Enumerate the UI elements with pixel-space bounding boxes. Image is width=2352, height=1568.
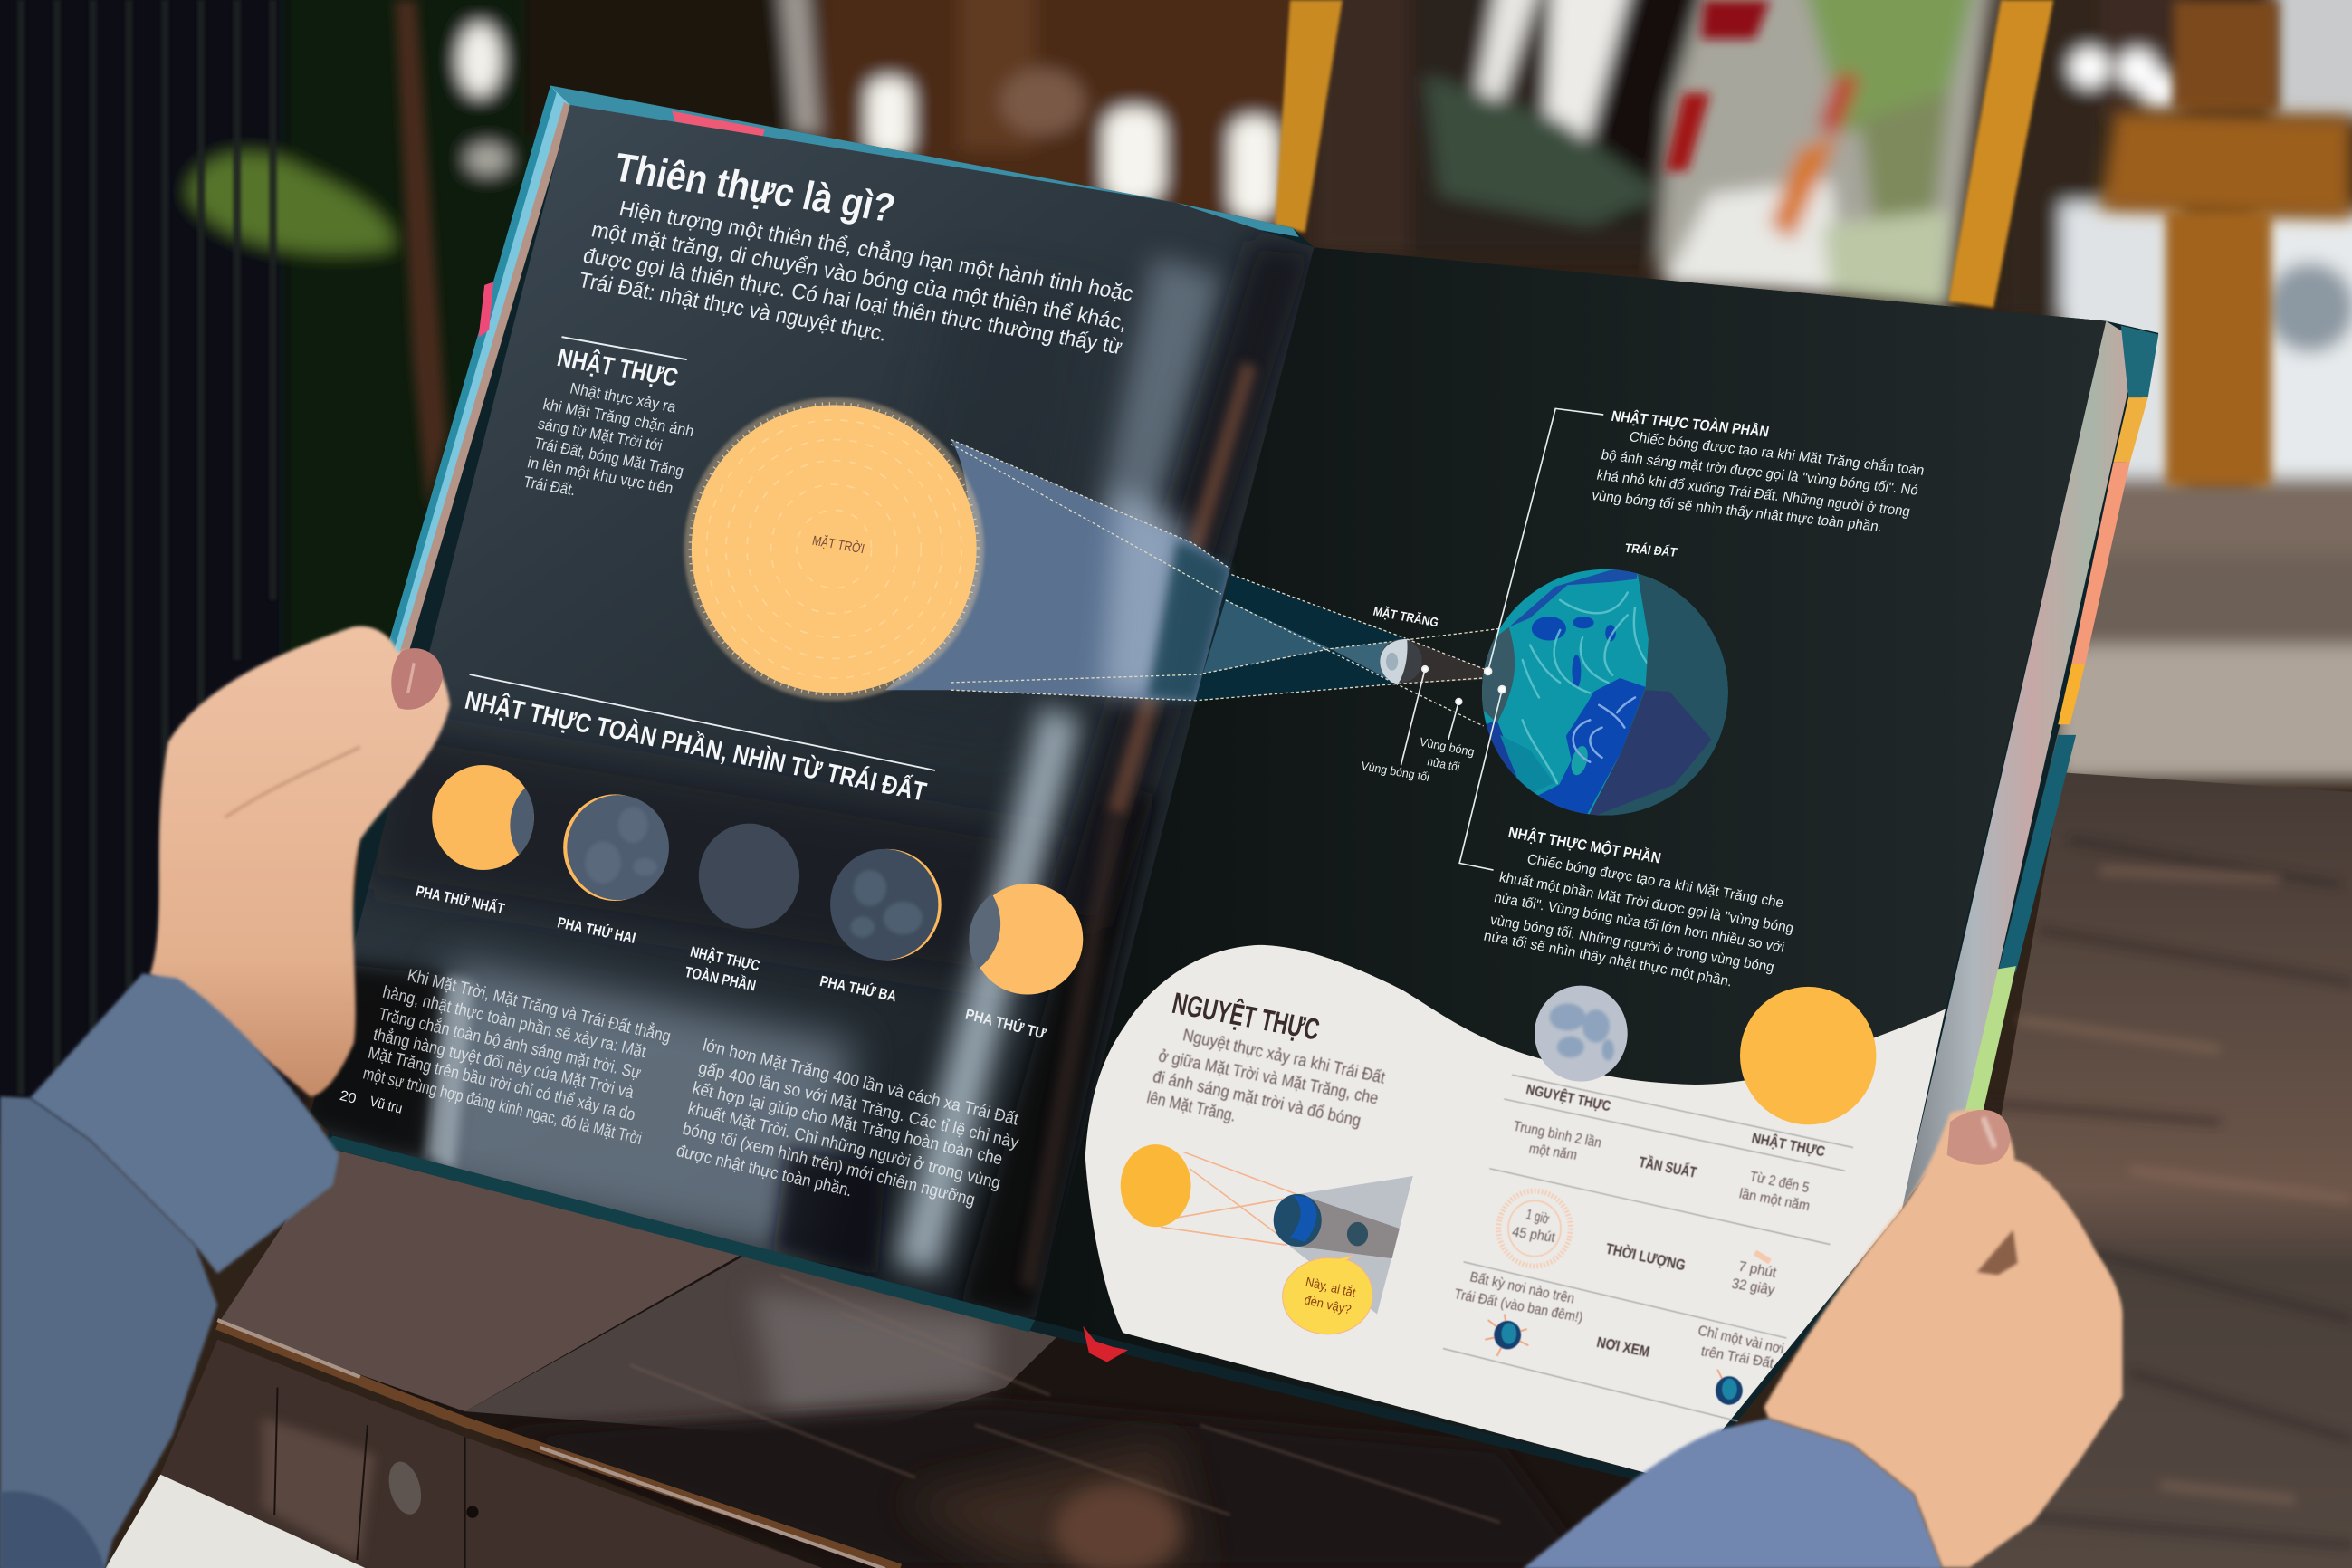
label: penumbra: nửa tối (1426, 754, 1461, 774)
body text column 1: hàng, nhật thực toàn phần sẽ xảy ra: Mặt (381, 983, 648, 1062)
lunar eclipse text (1145, 1026, 1387, 1131)
intro paragraph: Trái Đất: nhật thực và nguyệt thực. (577, 268, 889, 347)
small moon (1535, 986, 1628, 1082)
right hand (1764, 1110, 2123, 1567)
callout: total eclipse: khá nhỏ khi đổ xuống Trái Đất. Những người ở trong (1595, 467, 1912, 520)
leaf (189, 155, 394, 253)
earth in diagram (1482, 543, 1728, 815)
body text column 1 (361, 965, 673, 1149)
bookmark ribbon (1083, 1326, 1128, 1362)
top cover edge (550, 85, 1299, 237)
book cover (322, 85, 2158, 1491)
callout: total eclipse: vùng bóng tối sẽ nhìn thấy nhật thực toàn phần. (1591, 488, 1884, 535)
earth in diagram: TRÁI ĐẤT (1623, 540, 1678, 559)
left sleeve body (0, 1096, 217, 1568)
comparison table: Bất kỳ nơi nào trên (1468, 1269, 1576, 1307)
nail (1947, 1110, 2010, 1165)
intro paragraph: Hiện tượng một thiên thể, chẳng hạn một hành tinh hoặc (617, 195, 1136, 306)
lunar eclipse text: Nguyệt thực xảy ra khi Trái Đất (1181, 1026, 1387, 1088)
body text column 1: Khi Mặt Trời, Mặt Trăng và Trái Đất thẳng (406, 965, 673, 1047)
small sun (1740, 987, 1876, 1124)
comparison table: trên Trái Đất (1699, 1343, 1775, 1372)
callout: partial eclipse: khuất một phần Mặt Trời được gọi là "vùng bóng (1497, 870, 1795, 936)
page gloss highlights (300, 240, 1320, 1320)
body text column 2: khuất Mặt Trời. Chỉ những người ở trong vùng (686, 1099, 1002, 1193)
nail (391, 648, 443, 710)
finger shadow (1977, 1230, 2018, 1275)
cover spine stripe (370, 85, 570, 705)
callout: total eclipse: Chiếc bóng được tạo ra khi Mặt Trăng chắn toàn (1628, 428, 1927, 479)
plank 1 (217, 1143, 750, 1411)
phase 4: PHA THỨ TƯ (963, 1005, 1047, 1043)
page number: Vũ trụ (368, 1095, 404, 1117)
duration ring (1498, 1191, 1571, 1266)
body text column 2: bóng tối (xem hình trên) mới chiêm ngưỡng (681, 1120, 977, 1210)
oceans (1528, 678, 1646, 815)
panel: lunar eclipse (1085, 945, 1946, 1482)
bokeh market (1658, 0, 1995, 308)
heading: total eclipse phases (462, 674, 935, 808)
solar eclipse text: Nhật thực xảy ra (569, 379, 678, 416)
callout: partial eclipse: nửa tối". Vùng bóng nửa tối lớn hơn nhiều so với (1493, 890, 1786, 956)
lunar eclipse diagram (1121, 1144, 1413, 1334)
lunar eclipse text: lên Mặt Trăng. (1145, 1088, 1238, 1126)
callout: partial eclipse: NHẬT THỰC MỘT PHẦN (1506, 824, 1663, 866)
left page (300, 105, 1320, 1320)
solar eclipse text: sáng từ Mặt Trời tới (536, 415, 664, 454)
page number (339, 1088, 404, 1117)
callout: total eclipse: bộ ánh sáng mặt trời được gọi là "vùng bóng tối". Nó (1600, 447, 1920, 499)
body text column 1: một sự trùng hợp đáng kinh ngạc, đó là Mặt Trời (361, 1064, 644, 1149)
comparison table: 1 giờ (1525, 1207, 1551, 1228)
totality (684, 824, 799, 994)
body text column 2: được nhật thực toàn phần. (674, 1142, 854, 1200)
shadow cone from sun to moon (885, 439, 1507, 726)
night side (1590, 574, 1727, 815)
left hand (150, 626, 450, 1096)
solar eclipse text (521, 379, 696, 499)
page number: 20 (339, 1088, 358, 1107)
phase 3 (818, 849, 942, 1005)
comparison table: TẦN SUẤT (1637, 1153, 1698, 1181)
comparison table (1443, 1075, 1853, 1421)
tree branch (395, 0, 447, 510)
comparison table: 45 phút (1511, 1225, 1557, 1246)
right wood and sky (2001, 0, 2106, 315)
lunar eclipse text: đi ánh sáng mặt trời và đổ bóng (1151, 1067, 1362, 1131)
heading: Nhật thực: NHẬT THỰC (555, 343, 681, 392)
totality: NHẬT THỰC (689, 943, 761, 974)
solar eclipse text: Trái Đất. (521, 473, 578, 499)
label: penumbra: Vùng bóng (1419, 735, 1476, 759)
lunar eclipse diagram: đèn vậy? (1303, 1292, 1353, 1317)
body text column 1: Mặt Trăng trên bầu trời chỉ có thể xảy ra do (366, 1044, 637, 1125)
body text column 2 (674, 1036, 1021, 1210)
callout lines (1401, 408, 1603, 870)
icon: earth viewing local (1716, 1370, 1743, 1405)
totality: TOÀN PHẦN (684, 963, 758, 994)
phase 1 (416, 765, 534, 913)
label: umbra: Vùng bóng tối (1360, 759, 1431, 784)
comparison table: Trung bình 2 lần (1512, 1119, 1603, 1152)
floor (105, 1475, 368, 1568)
comparison table: lần một năm (1737, 1186, 1812, 1214)
lunar eclipse diagram: Này, ai tắt (1305, 1274, 1357, 1300)
body text column 2: lớn hơn Mặt Trăng 400 lần và cách xa Trái Đất (701, 1036, 1020, 1130)
table (105, 772, 2352, 1568)
body text column 2: kết hợp lại giúp cho Mặt Trăng hoàn toàn che (691, 1079, 1004, 1169)
plank 2 (465, 1253, 1065, 1440)
heading: Nguyệt thực: NGUYỆT THỰC (1169, 986, 1323, 1047)
page edge stack and tabs (1902, 321, 2158, 1208)
comparison table: Chỉ một vài nơi (1697, 1323, 1785, 1357)
phase 1: PHA THỨ NHẤT (415, 883, 506, 917)
comparison table: 7 phút (1737, 1259, 1778, 1281)
body text column 1: Trăng chắn toàn bộ ánh sáng mặt trời. Sự (377, 1004, 644, 1083)
comparison table: NHẬT THỰC (1750, 1129, 1827, 1160)
moon in diagram: MẶT TRĂNG (1372, 604, 1440, 629)
solar eclipse text: khi Mặt Trăng chặn ánh (541, 395, 696, 440)
solar eclipse text: Trái Đất, bóng Mặt Trăng (532, 434, 685, 480)
body text column 1: thẳng hàng tuyệt đối này của Mặt Trời và (371, 1025, 636, 1103)
speech bubble (1283, 1255, 1372, 1334)
intro paragraph: một mặt trăng, di chuyển vào bóng của một thiên thể khác, (589, 217, 1130, 335)
callout: partial eclipse: vùng bóng tối. Những người ở trong vùng bóng (1488, 913, 1775, 976)
moon in diagram (1372, 604, 1440, 684)
callout: total eclipse: NHẬT THỰC TOÀN PHẦN (1610, 407, 1771, 440)
table front (160, 1340, 825, 1568)
comparison table: THỜI LƯỢNG (1604, 1240, 1688, 1274)
lunar eclipse text: ở giữa Mặt Trời và Mặt Trăng, che (1157, 1047, 1380, 1108)
wooden beams (1275, 0, 1343, 233)
callout: partial eclipse (1482, 824, 1795, 990)
body text column 2: gấp 400 lần so với Mặt Trăng. Các tỉ lệ chỉ này (696, 1058, 1021, 1152)
comparison table: NGUYỆT THỰC (1525, 1080, 1612, 1114)
label: penumbra (1419, 735, 1476, 774)
right page (1035, 247, 2106, 1482)
comparison table: Từ 2 đến 5 (1748, 1169, 1811, 1196)
title: Thiên thực là gì? (610, 145, 899, 231)
phase 2 (556, 794, 669, 947)
left sleeve shadow (0, 1491, 105, 1568)
section: solar eclipse (555, 337, 687, 392)
large sun (684, 397, 984, 701)
swirls (1523, 592, 1647, 783)
phase 3: PHA THỨ BA (818, 972, 898, 1005)
phase 4 (965, 884, 1083, 1037)
comparison table: Trái Đất (vào ban đêm!) (1453, 1286, 1584, 1326)
red lanterns (1701, 0, 1770, 39)
heading: total eclipse phases: NHẬT THỰC TOÀN PHẦN, NHÌN TỪ TRÁI ĐẤT (462, 684, 930, 808)
comparison table: NƠI XEM (1595, 1334, 1651, 1361)
comparison table: một năm (1527, 1142, 1579, 1163)
callout: partial eclipse: Chiếc bóng được tạo ra khi Mặt Trăng che (1525, 852, 1785, 911)
solar eclipse text: in lên một khu vực trên (526, 453, 675, 497)
callout: partial eclipse: nửa tối sẽ nhìn thấy nhật thực một phần. (1482, 929, 1734, 990)
intro paragraph: được gọi là thiên thực. Có hai loại thiên thực thường thấy từ (580, 244, 1124, 359)
comparison table: 32 giây (1730, 1276, 1776, 1298)
callout: total eclipse (1591, 407, 1927, 535)
icon: earth viewing anywhere (1485, 1314, 1528, 1356)
label: sun: MẶT TRỜI (810, 533, 865, 557)
right sleeve (1523, 1419, 1943, 1568)
left sleeve cuff (30, 973, 339, 1274)
phase 2: PHA THỨ HAI (556, 913, 637, 947)
